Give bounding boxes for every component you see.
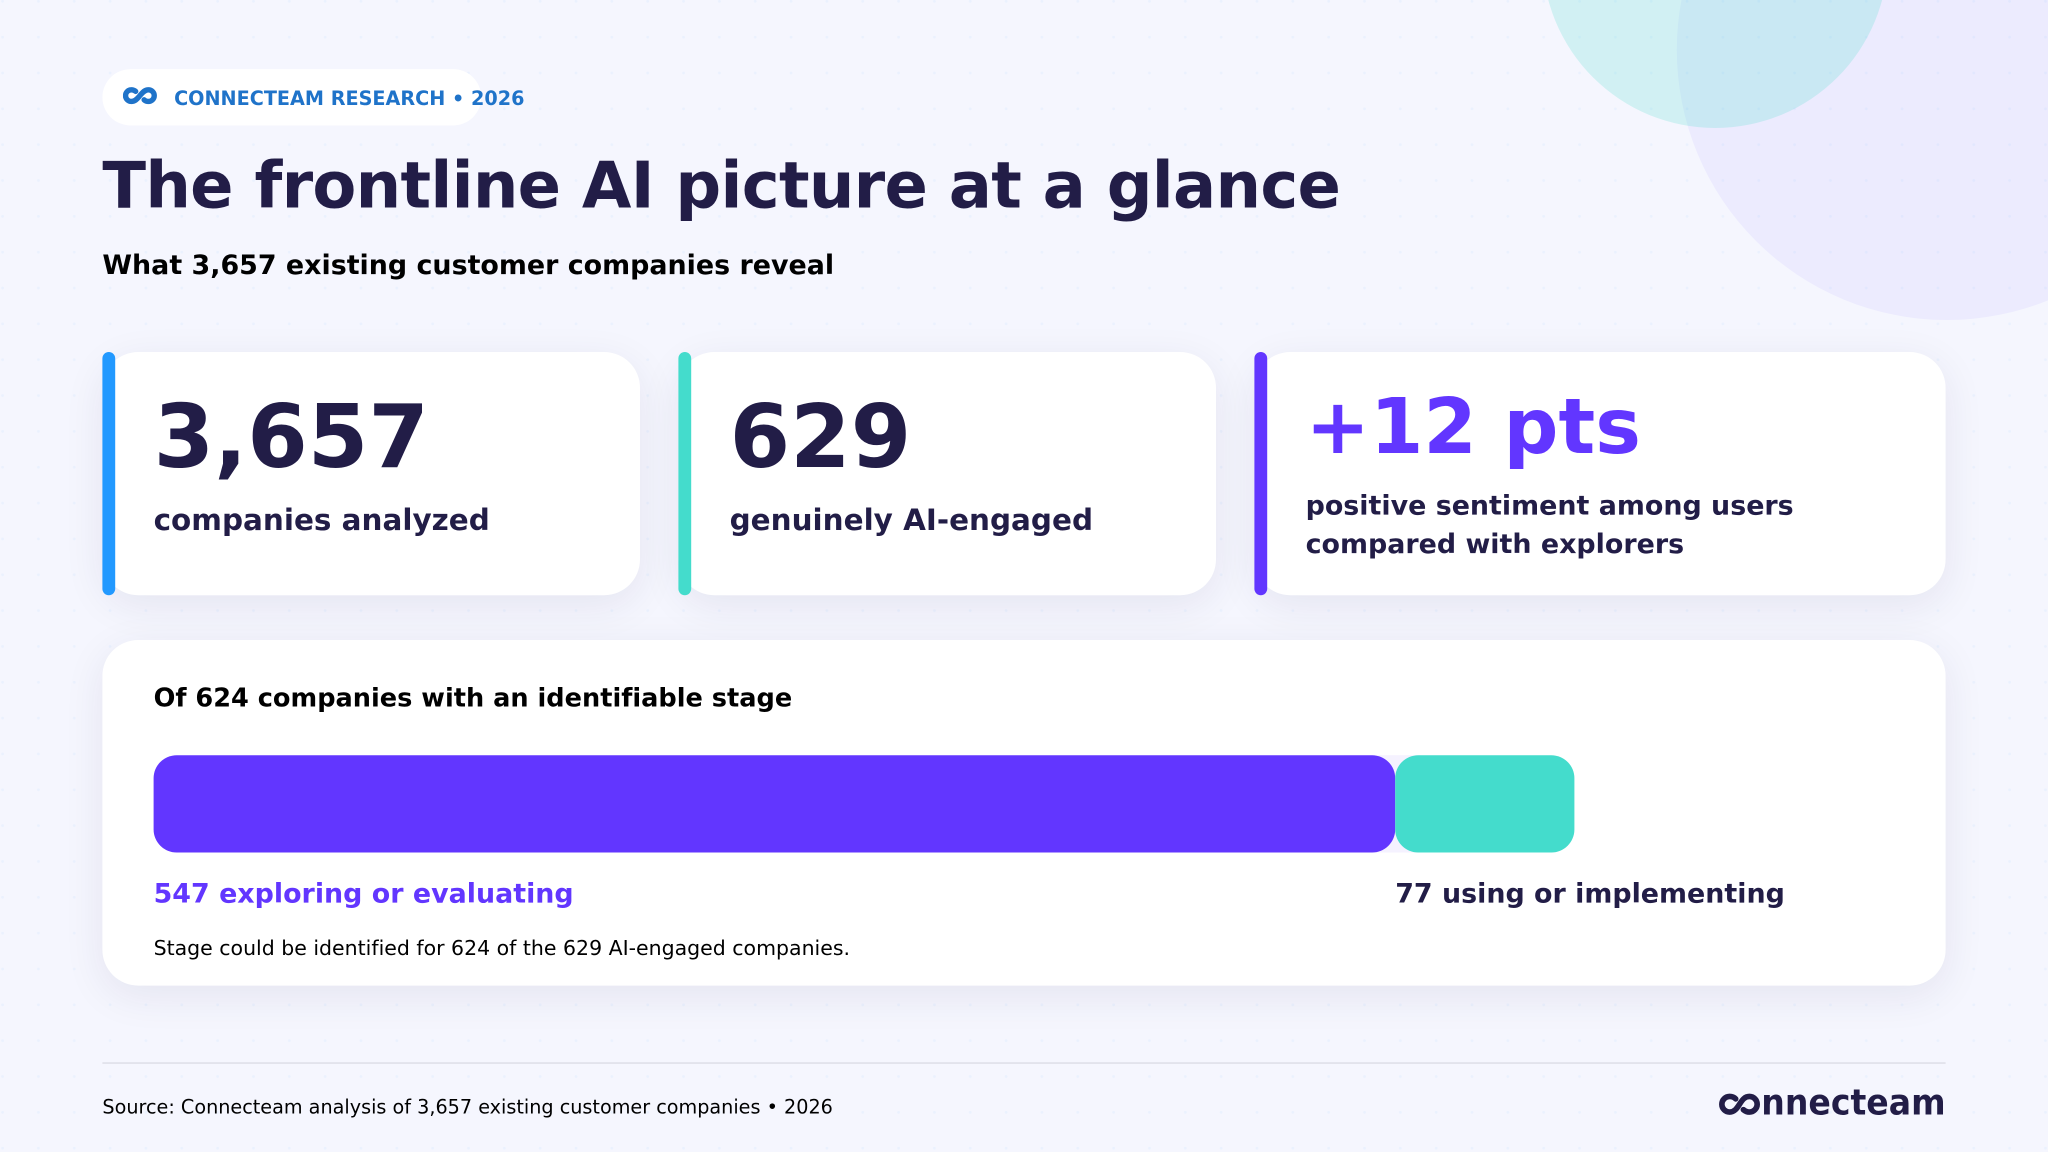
label: genuinely AI-engaged: genuinely AI-engaged [730, 504, 1093, 538]
label: 77 using or implementing: 77 using or implementing [1395, 878, 1785, 909]
panel: AI-engaged [678, 352, 1216, 595]
label: companies analyzed: companies analyzed [154, 504, 490, 538]
accent bar: blue [102, 352, 115, 595]
stacked bar chart [154, 755, 1574, 852]
bar track [1344, 755, 1421, 852]
panel: companies analyzed [102, 352, 640, 595]
label: positive sentiment: compared with explorers [1306, 528, 1684, 559]
accent bar: purple [1254, 352, 1267, 595]
panel: stage breakdown [102, 640, 1946, 986]
badge text: CONNECTEAM RESEARCH • 2026 [174, 87, 524, 110]
stat: 629: 629 [730, 388, 911, 489]
label: positive sentiment [1306, 490, 1794, 559]
label: 547 exploring or evaluating: 547 exploring or evaluating [154, 878, 574, 909]
title: The frontline AI picture at a glance [102, 148, 1340, 223]
label: positive sentiment: positive sentiment among users [1306, 490, 1794, 520]
panel: sentiment [1254, 352, 1946, 595]
accent bar: teal [678, 352, 691, 595]
panel heading: Of 624 companies with an identifiable stage [154, 682, 792, 713]
note: Stage could be identified for 624 of the 629 AI-engaged companies. [154, 936, 850, 960]
bar segment: 77 using [1395, 755, 1574, 852]
stat: 3,657: 3,657 [154, 388, 429, 489]
source footer: Source: Connecteam analysis of 3,657 existing customer companies • 2026 [102, 1096, 833, 1119]
bar segment: 547 exploring [154, 755, 1395, 852]
stat: +12 pts: +12 pts [1306, 383, 1641, 472]
badge: Connecteam Research 2026 [102, 70, 524, 126]
subtitle: What 3,657 existing customer companies reveal [102, 250, 834, 280]
icon: infinity logo mark [122, 87, 157, 104]
